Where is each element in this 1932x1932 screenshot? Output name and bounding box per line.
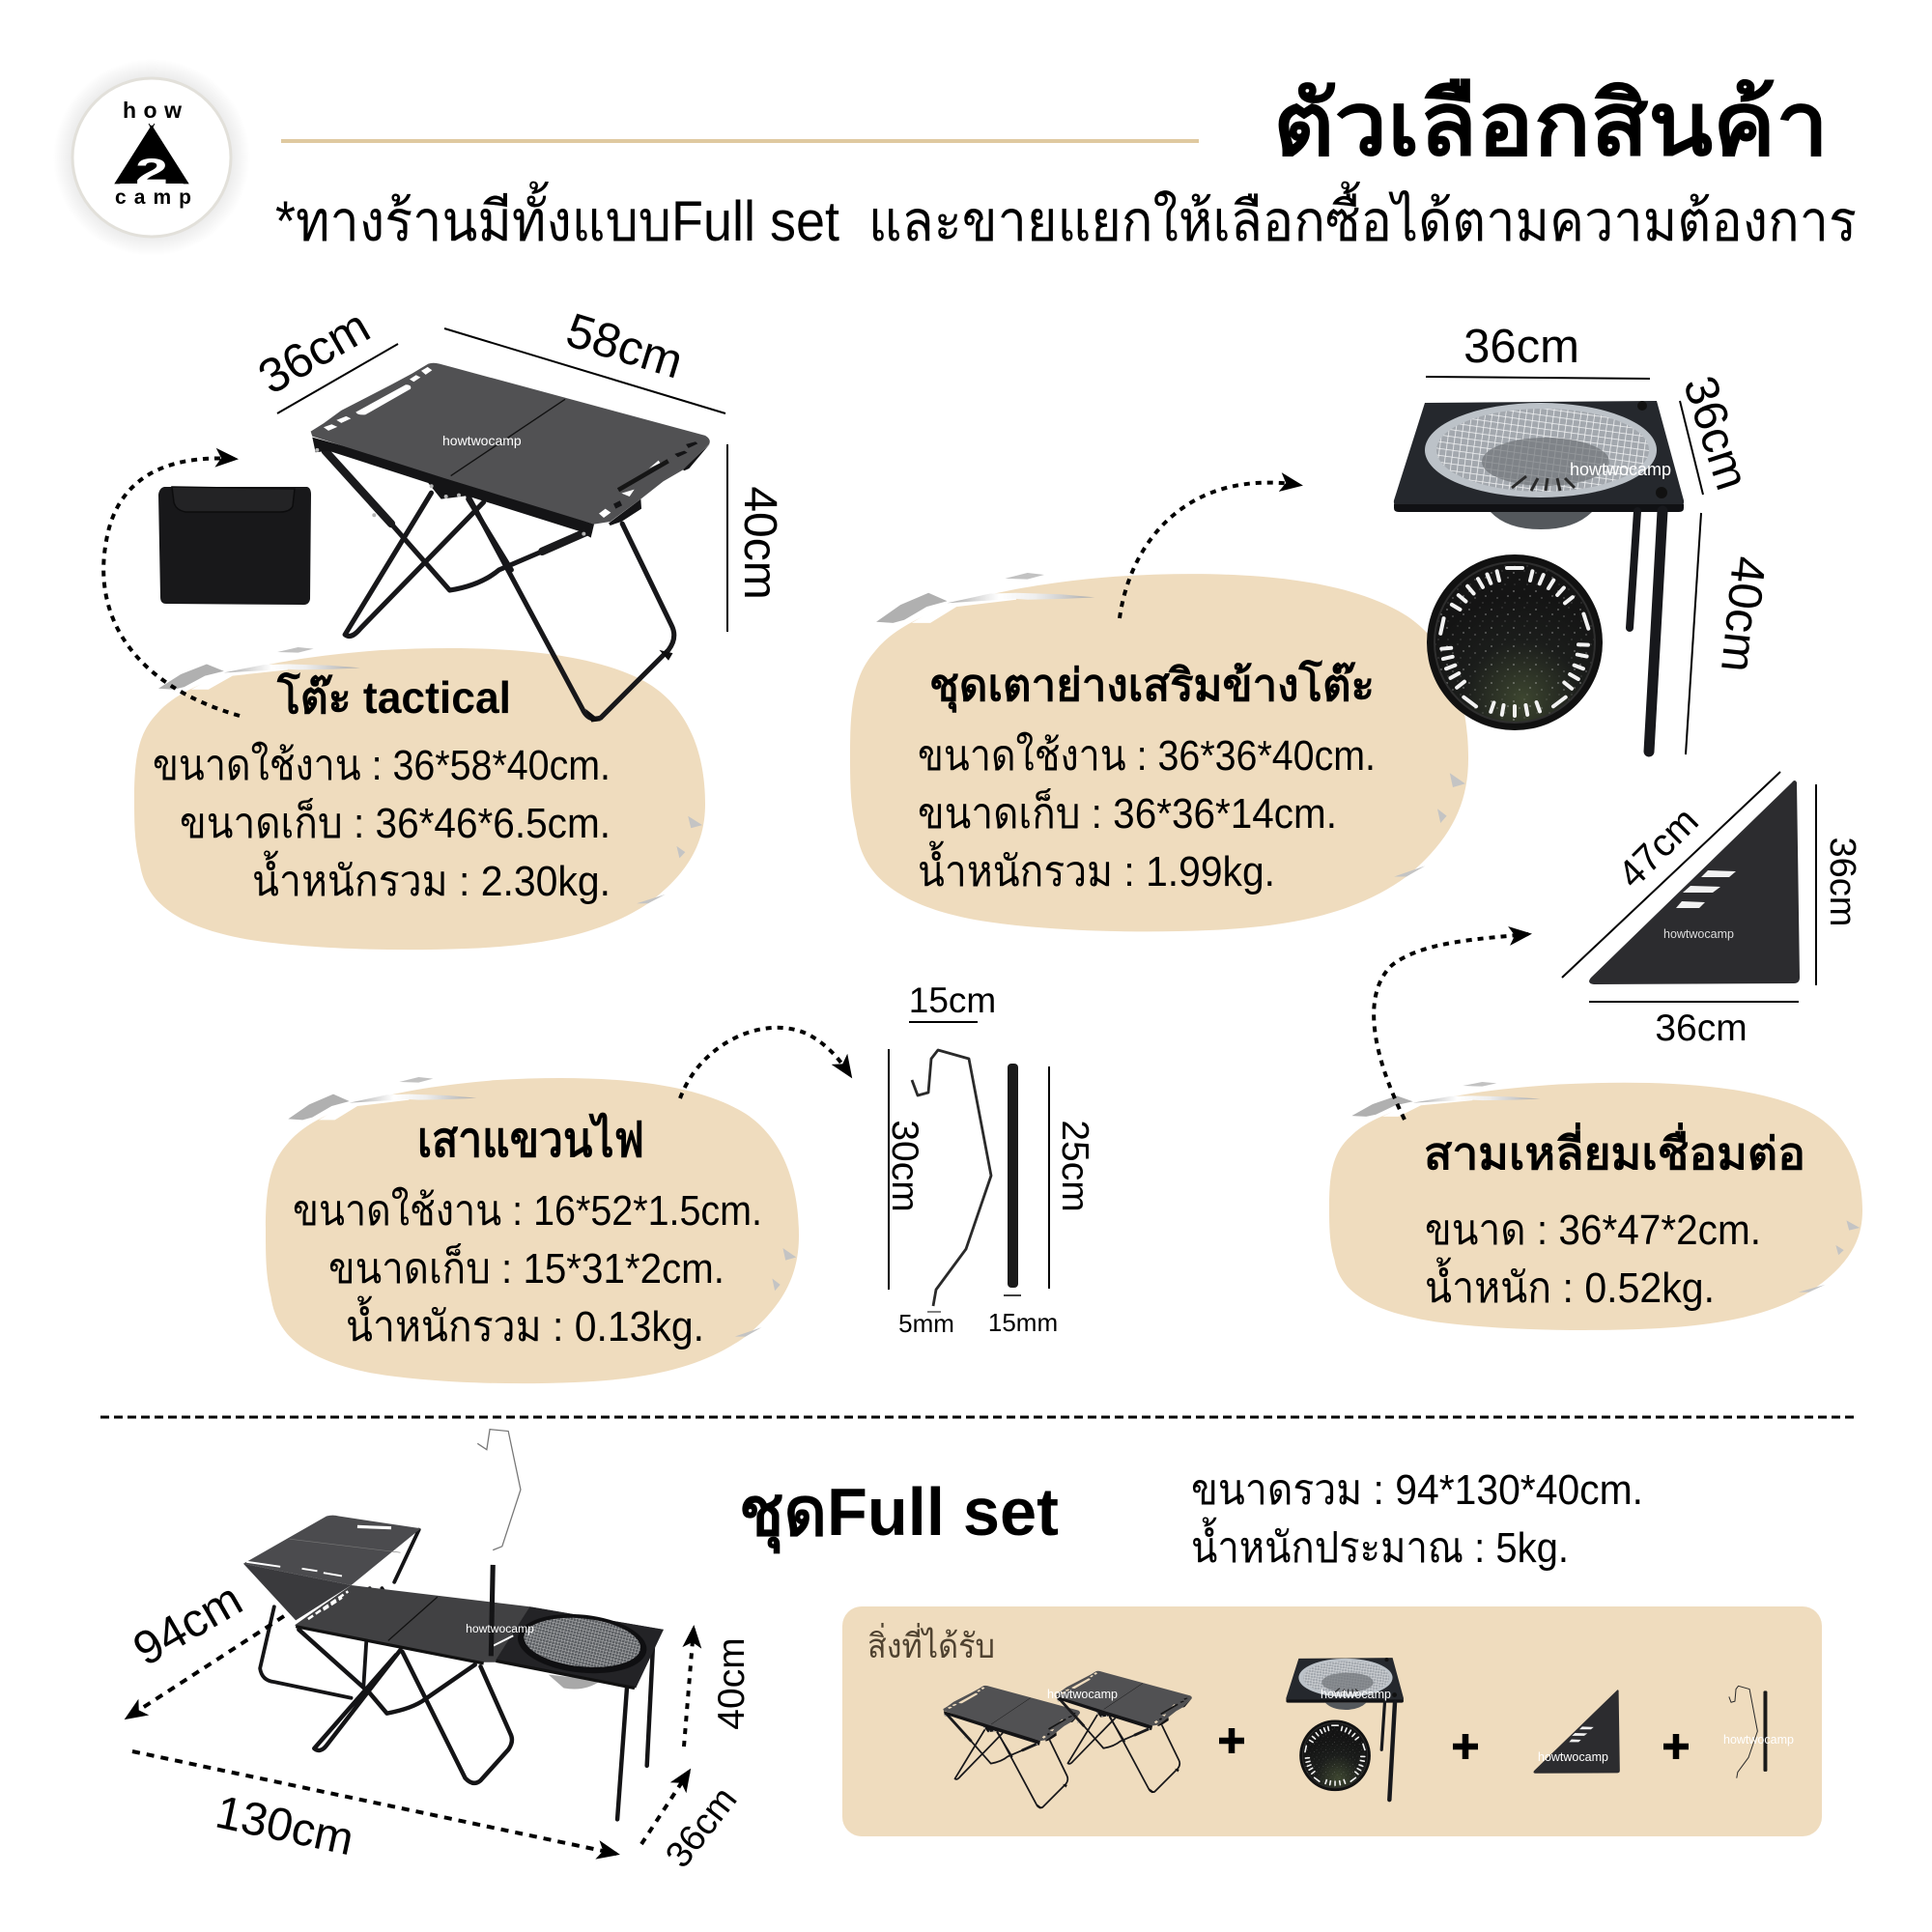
header rule: [281, 139, 1199, 143]
full set heading: ชุดFull set: [739, 1474, 1059, 1554]
light pole specs: ขนาดเก็บ : 15*31*2cm.: [328, 1243, 724, 1293]
arrow: 130cm: 130cm: [212, 1787, 358, 1865]
label: 5mm: 5mm: [898, 1309, 954, 1338]
arrow: light pole: [680, 1028, 850, 1098]
tactical heading: โต๊ะ tactical: [276, 671, 511, 723]
label: 15mm: [988, 1295, 1058, 1337]
tactical specs: น้ำหนักรวม : 2.30kg.: [252, 850, 611, 905]
plus sign 1: [1219, 1728, 1244, 1753]
arrow: grill: [1120, 483, 1299, 618]
dimension: triangle side 36cm: 36cm: [1822, 838, 1862, 926]
product photo: grill set: [1394, 401, 1684, 752]
dimension: rod 25cm: 25cm: [1054, 1120, 1095, 1212]
full set specs: ขนาดรวม : 94*130*40cm.: [1191, 1466, 1643, 1514]
product photo: storage bag: [158, 487, 311, 605]
light pole heading: เสาแขวนไฟ: [417, 1112, 644, 1167]
watermark: howtwocamp: [1663, 927, 1734, 941]
dimension: table width 58cm: 58cm: [560, 302, 689, 389]
panel: light pole text blob: [266, 1077, 799, 1383]
logo: how2camp badge: how: [123, 98, 182, 123]
item: triangle connector: [1533, 1690, 1620, 1774]
label: 15mm: 15mm: [988, 1308, 1058, 1337]
panel: grill text blob: [850, 573, 1468, 931]
included label: สิ่งที่ได้รับ: [867, 1623, 995, 1665]
grill specs: ขนาดใช้งาน : 36*36*40cm.: [918, 731, 1376, 780]
dimension: table height 40cm: 40cm: [734, 486, 785, 600]
grill specs: ขนาดเก็บ : 36*36*14cm.: [918, 788, 1337, 838]
item: light pole: [1729, 1686, 1767, 1778]
grill specs: น้ำหนักรวม : 1.99kg.: [918, 840, 1275, 895]
dimension: table width 58cm: [444, 302, 725, 413]
tactical specs: ขนาดใช้งาน : 36*58*40cm.: [153, 741, 611, 789]
triangle specs: [1425, 1207, 1761, 1312]
light pole specs: ขนาดใช้งาน : 16*52*1.5cm.: [293, 1186, 762, 1235]
triangle specs: ขนาด : 36*47*2cm.: [1425, 1207, 1761, 1254]
panel: triangle text blob: [1329, 1082, 1862, 1330]
dimension: grill width 36cm: 36cm: [1463, 321, 1579, 373]
item: second table: [1056, 1671, 1192, 1793]
watermark: howtwocamp: [1538, 1750, 1608, 1764]
dimension: triangle hypotenuse 47cm: [1562, 772, 1780, 978]
watermark: howtwocamp: [1321, 1688, 1391, 1701]
title: ตัวเลือกสินค้า: [1273, 75, 1829, 174]
dimension: triangle base 36cm: 36cm: [1655, 1008, 1747, 1049]
arrow: triangle: [1374, 934, 1528, 1120]
grill specs: [918, 731, 1376, 895]
light pole specs: น้ำหนักรวม : 0.13kg.: [346, 1295, 704, 1350]
watermark: howtwocamp: [1047, 1688, 1118, 1701]
arrow: 40cm: 40cm: [711, 1637, 753, 1730]
section divider: [100, 1416, 1858, 1418]
arrow: 94cm: 94cm: [125, 1574, 251, 1676]
arrow: bag to table: [103, 458, 240, 716]
illustration: assembled full set: [243, 1430, 664, 1819]
light pole specs: [293, 1186, 762, 1350]
arrow: 40cm: [684, 1629, 753, 1747]
triangle heading: สามเหลี่ยมเชื่อมต่อ: [1424, 1122, 1805, 1179]
item: grill set: [1286, 1658, 1404, 1800]
product photo: tactical table: [311, 363, 710, 723]
panel: tactical table text blob: [134, 647, 705, 950]
logo: how2camp badge: camp: [115, 186, 191, 209]
watermark: howtwocamp: [1570, 460, 1671, 479]
panel: included items: [842, 1606, 1822, 1836]
plus sign 2: [1453, 1734, 1478, 1759]
tactical specs: [153, 741, 611, 905]
tactical specs: ขนาดเก็บ : 36*46*6.5cm.: [180, 798, 611, 847]
item: first table: [943, 1686, 1080, 1808]
dimension: grill height 40cm: [1686, 513, 1775, 754]
arrow: 130cm: [132, 1751, 616, 1865]
triangle specs: น้ำหนัก : 0.52kg.: [1425, 1257, 1715, 1312]
dimension: hanger 30cm: 30cm: [884, 1120, 925, 1212]
logo: how2camp badge: [53, 59, 250, 256]
illustration: assembled full set: howtwocamp: [466, 1622, 534, 1635]
full set specs: น้ำหนักประมาณ : 5kg.: [1191, 1517, 1569, 1572]
arrow: 94cm: [125, 1574, 284, 1718]
plus sign 3: [1663, 1734, 1689, 1759]
grill heading: ชุดเตาย่างเสริมข้างโต๊ะ: [929, 659, 1375, 713]
logo: how2camp badge: 2: [135, 152, 168, 191]
subtitle: *ทางร้านมีทั้งแบบFull set และขายแยกให้เลือกซื้อได้ตามความต้องการ: [275, 182, 1857, 253]
dimension: grill depth 36cm: 36cm: [1673, 370, 1758, 497]
dimension: hanger 15cm: 15cm: [909, 980, 996, 1020]
dimension: grill height 40cm: 40cm: [1711, 554, 1775, 674]
full set specs: [1191, 1466, 1643, 1572]
dimension: triangle hypotenuse 47cm: 47cm: [1610, 800, 1707, 896]
watermark: howtwocamp: [442, 433, 522, 448]
product photo: triangle connector: [1589, 781, 1800, 984]
arrow: 36cm: 36cm: [658, 1779, 746, 1875]
watermark: howtwocamp: [1723, 1733, 1794, 1747]
dimension: table depth 36cm: 36cm: [249, 298, 379, 405]
product photo: light pole: [912, 1050, 1018, 1306]
